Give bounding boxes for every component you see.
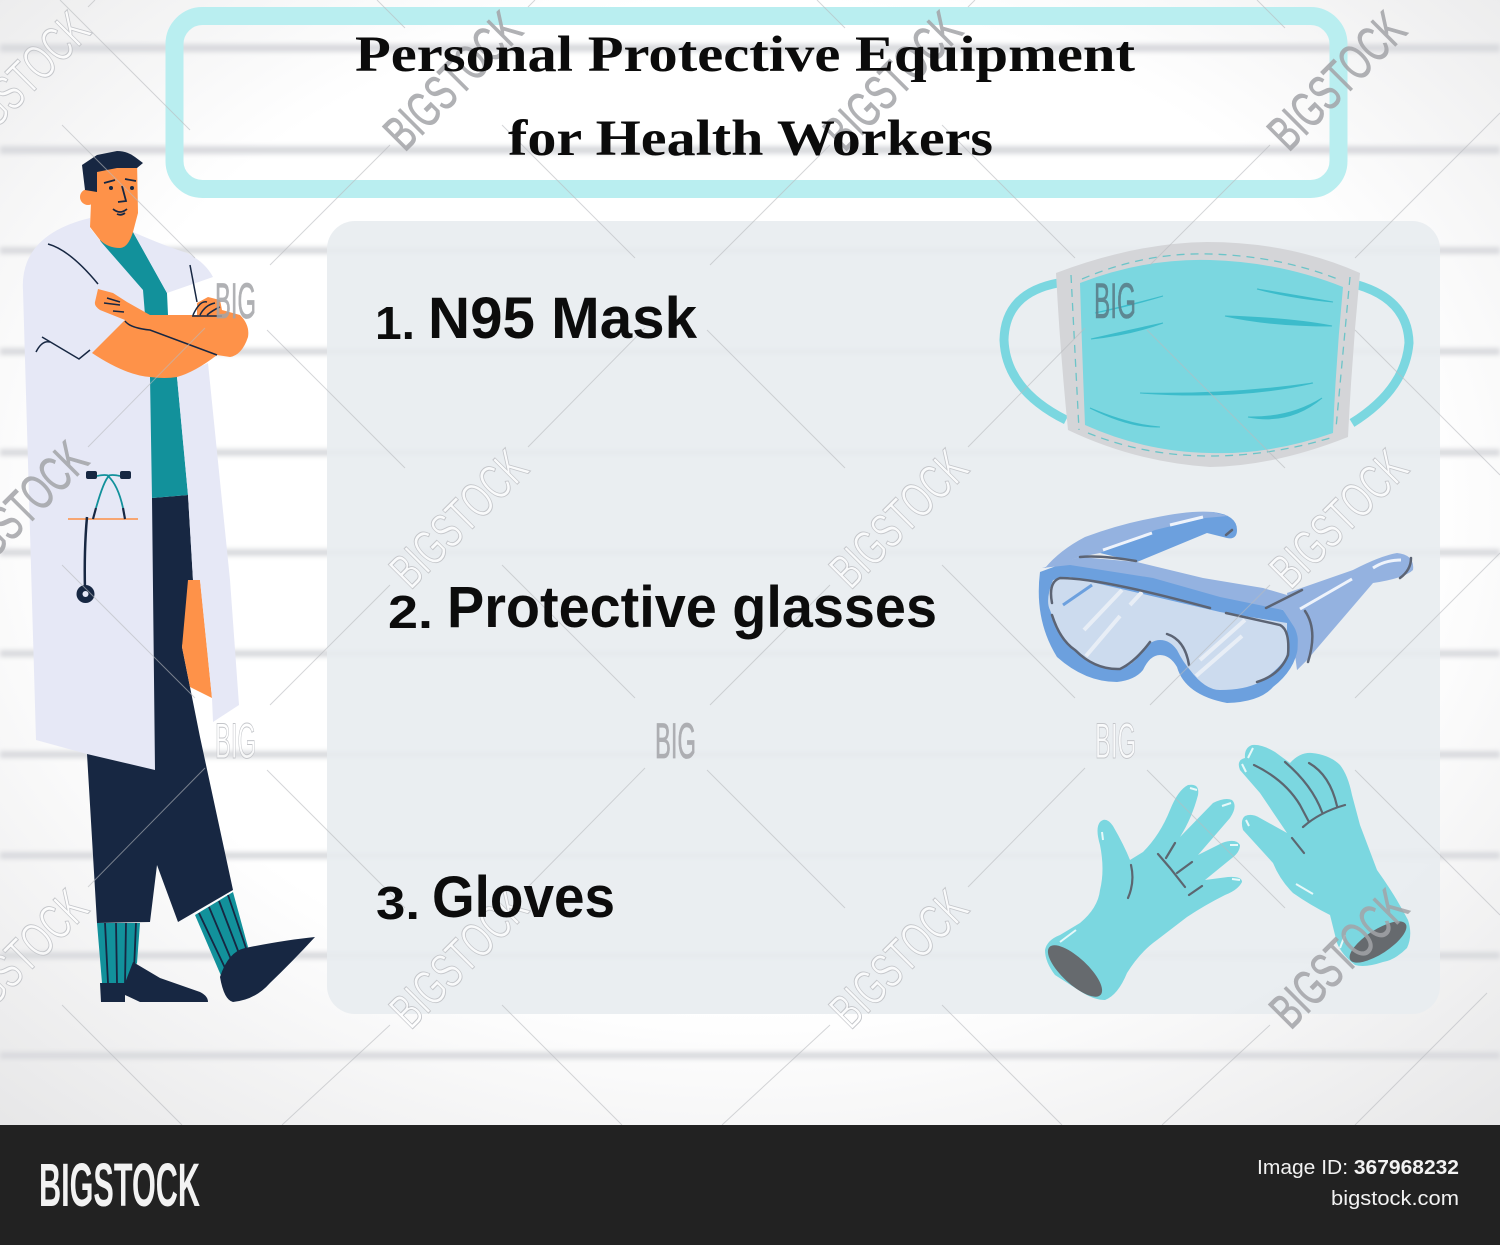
title: for Health Workers [508,111,993,167]
illustration: doctor [23,151,315,1002]
right glove creases [1254,762,1345,853]
watermark: BIGSTOCK marks: BIG [1095,713,1136,769]
watermark: BIGSTOCK marks: BIGSTOCK [819,439,979,599]
list item 1: N95 Mask: N95 Mask [428,286,698,351]
content panel [327,221,1440,1014]
crossed arms [92,289,248,378]
frame [1039,562,1298,703]
image id: Image ID: 367968232 [1257,1157,1459,1179]
footer bar [0,1125,1500,1245]
socks and shoes [97,892,315,1002]
list item 2: Protective glasses: Protective glasses [447,575,937,640]
watermark: BIGSTOCK marks [0,1,1419,1039]
near temple [1287,553,1413,670]
left glove cuff opening [1041,938,1109,1004]
title [355,27,1135,167]
trousers [87,495,233,923]
watermark: BIGSTOCK marks: BIG [1094,273,1136,329]
lens highlights [1084,590,1245,676]
left glove creases [1128,843,1202,898]
watermark: BIGSTOCK marks: BIG [215,713,256,769]
mask stitching [1071,254,1350,456]
site url: bigstock.com [1331,1188,1459,1210]
watermark: BIGSTOCK marks: BIG [655,713,696,769]
left glove [1045,785,1242,1000]
mask pleats [1090,289,1333,427]
ear loops [1004,283,1409,423]
far temple [1100,512,1237,562]
list item 3: Gloves: 3. [376,877,420,929]
list item 2: Protective glasses: 2. [388,586,433,638]
illustration: protective goggles [1039,512,1413,703]
mask border [1056,242,1360,467]
right glove cuff opening [1344,914,1412,970]
right glove [1239,745,1410,966]
head [80,151,143,248]
coat lining [182,580,212,698]
watermark: BIGSTOCK marks: BIGSTOCK [379,879,539,1039]
list item 1: N95 Mask: 1. [375,297,415,349]
illustration: surgical mask [1004,242,1409,467]
watermark: BIGSTOCK marks: BIGSTOCK [379,439,539,599]
title frame [174,16,1338,189]
title: Personal Protective Equipment [355,27,1135,83]
illustration: gloves [1041,745,1412,1004]
frame top band [1042,557,1313,670]
white coat [23,218,155,770]
watermark: BIGSTOCK marks: BIG [215,273,256,329]
stethoscope [68,471,138,603]
shirt [100,232,188,498]
mask fabric [1080,260,1343,453]
watermark: BIGSTOCK marks: BIGSTOCK [1259,879,1419,1039]
list item 3: Gloves: Gloves [432,865,615,930]
coat and arm lines [36,244,222,359]
frame outlines [1051,530,1411,682]
watermark: BIGSTOCK marks: BIGSTOCK [1259,439,1419,599]
lens [1048,577,1287,690]
footer logo: BIGSTOCK [39,1151,200,1219]
watermark: BIGSTOCK marks: BIGSTOCK [819,879,979,1039]
